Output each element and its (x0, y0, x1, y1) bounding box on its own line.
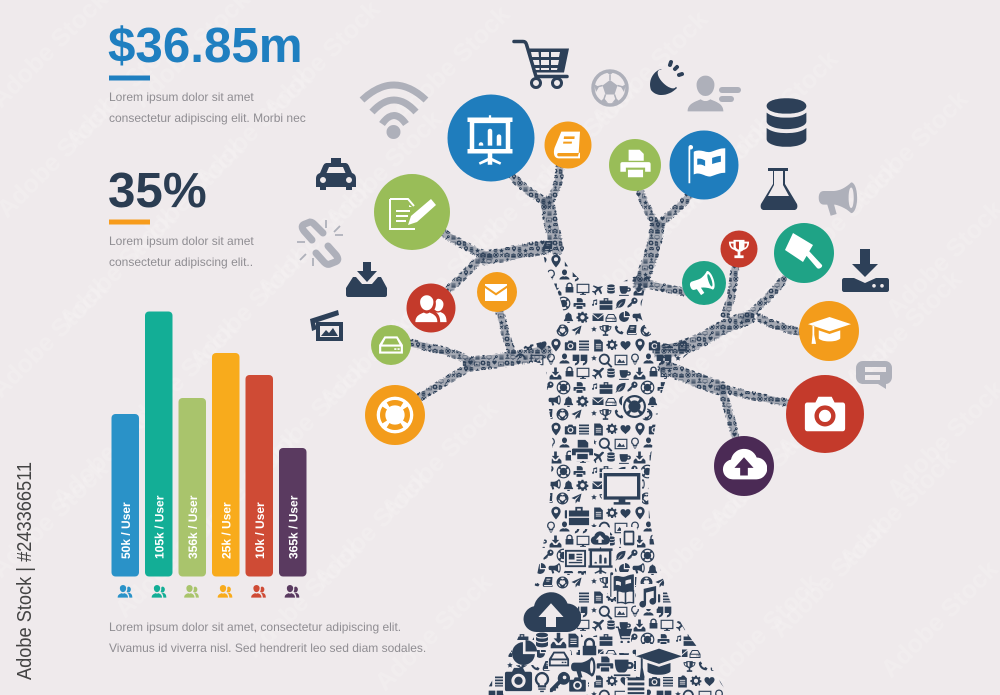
circle: hard drive (371, 325, 411, 365)
user icons row (118, 585, 299, 598)
icon: grey megaphone (819, 182, 857, 216)
circle: camera (786, 375, 864, 453)
bar 50k: 50k / User (119, 502, 133, 559)
bar 10k: 10k / User (253, 502, 267, 559)
icon: person speaking (688, 76, 741, 111)
watermark grid: Adobe Stock (765, 515, 893, 643)
heading: $36.85m: $36.85m (108, 18, 303, 73)
watermark grid: Adobe Stock (375, 395, 503, 523)
text: revenue description (109, 90, 306, 125)
watermark grid: Adobe Stock (387, 0, 515, 128)
large trunk icons (503, 394, 682, 695)
watermark grid: Adobe Stock (647, 115, 775, 243)
accent rule blue (109, 76, 150, 80)
stat block: revenue (108, 18, 306, 125)
watermark grid: Adobe Stock (369, 568, 497, 695)
circle: trophy (720, 230, 758, 268)
watermark grid: Adobe Stock (47, 385, 175, 513)
bar 105k: 105k / User (152, 495, 166, 559)
watermark grid: Adobe Stock (517, 75, 645, 203)
icon: photos (310, 310, 343, 341)
text: chart caption: Lorem ipsum dolor sit amet, consectetur adipiscing elit. (109, 620, 401, 634)
bar 25k: 25k / User (220, 502, 234, 559)
icon: wifi (362, 85, 426, 136)
watermark grid: Adobe Stock (845, 85, 973, 213)
watermark grid: Adobe Stock (715, 45, 843, 173)
watermark grid: Adobe Stock (771, 335, 899, 463)
watermark grid: Adobe Stock (449, 145, 577, 273)
watermark grid: Adobe Stock (59, 25, 187, 153)
watermark grid: Adobe Stock (115, 315, 243, 443)
icon: shopping cart (514, 42, 569, 88)
circle: presentation (448, 94, 534, 182)
watermark grid: Adobe Stock (839, 265, 967, 393)
text: percentage description: consectetur adipiscing elit.. (109, 255, 253, 269)
heading: 35%: 35% (108, 163, 207, 218)
watermark grid: Adobe Stock (121, 135, 249, 263)
circle: users (406, 284, 456, 332)
circle: cloud upload (714, 436, 774, 496)
watermark grid: Adobe Stock (703, 405, 831, 533)
watermark grid: Adobe Stock (319, 105, 447, 233)
icon: inbox download (346, 262, 387, 297)
trunk with icon texture (488, 241, 724, 695)
text: chart caption (109, 620, 426, 655)
watermark grid: Adobe Stock (635, 475, 763, 603)
icon: server download (842, 249, 889, 292)
bar 105k (145, 312, 172, 576)
icon: taxi (316, 158, 356, 190)
circle: book (544, 122, 592, 168)
circle: mail (477, 272, 517, 312)
icon: chat bubble (856, 361, 892, 389)
accent rule orange (109, 220, 150, 224)
bar 50k (112, 414, 139, 576)
watermark grid: Adobe Stock (641, 295, 769, 423)
watermark grid: Adobe Stock (189, 65, 317, 193)
watermark grid: Adobe Stock (183, 245, 311, 373)
watermark grid: Adobe Stock (313, 285, 441, 413)
text: percentage description (109, 234, 254, 269)
text: chart caption: Vivamus id viverra nisl. Sed hendrerit leo sed diam sodales. (109, 641, 426, 655)
watermark grid: Adobe Stock (109, 495, 237, 623)
icon: database (767, 98, 806, 147)
tree (410, 167, 798, 695)
circle: printer (609, 139, 661, 191)
branches (410, 167, 798, 436)
icon: spotlight (650, 62, 682, 95)
watermark grid: Adobe Stock (833, 445, 961, 573)
watermark grid: Adobe Stock (307, 465, 435, 593)
watermark grid: Adobe Stock (177, 425, 305, 553)
bar 356k (178, 398, 206, 576)
bar 25k (212, 353, 240, 576)
watermark grid: Adobe Stock (579, 185, 707, 313)
watermark grid: Adobe Stock (381, 215, 509, 343)
stock id, vertical: Adobe Stock | #243366511 (14, 462, 36, 680)
watermark grid: Adobe Stock (585, 5, 713, 133)
bar 10k (246, 375, 273, 576)
watermark grid: Adobe Stock (239, 535, 367, 663)
stat block: percentage (108, 163, 254, 269)
watermark grid: Adobe Stock (53, 205, 181, 333)
watermark grid: Adobe Stock (251, 175, 379, 303)
text: revenue description: Lorem ipsum dolor sit amet (109, 90, 254, 104)
watermark grid: Adobe Stock (245, 355, 373, 483)
bar chart: users (112, 312, 306, 598)
bar 365k (279, 448, 306, 576)
circle: gavel (774, 223, 834, 283)
text: revenue description: consectetur adipiscing elit. Morbi nec (109, 111, 306, 125)
circle: graduation cap (799, 301, 859, 361)
circle: document and pencil (374, 174, 450, 250)
watermark grid: Adobe Stock (777, 155, 905, 283)
circle: megaphone (682, 261, 726, 305)
watermark grid: Adobe Stock (697, 568, 825, 695)
icon: broken link (297, 220, 343, 266)
icon: soccer ball (593, 71, 627, 105)
icon: flask (761, 168, 797, 210)
watermark grid: Adobe Stock (709, 225, 837, 353)
bar 356k: 356k / User (186, 495, 200, 559)
bar 365k: 365k / User (286, 495, 300, 559)
watermark grid: Adobe Stock (875, 555, 1000, 683)
circle: life ring (365, 385, 425, 445)
circle: flag (670, 130, 738, 200)
text: percentage description: Lorem ipsum dolor sit amet (109, 234, 254, 248)
